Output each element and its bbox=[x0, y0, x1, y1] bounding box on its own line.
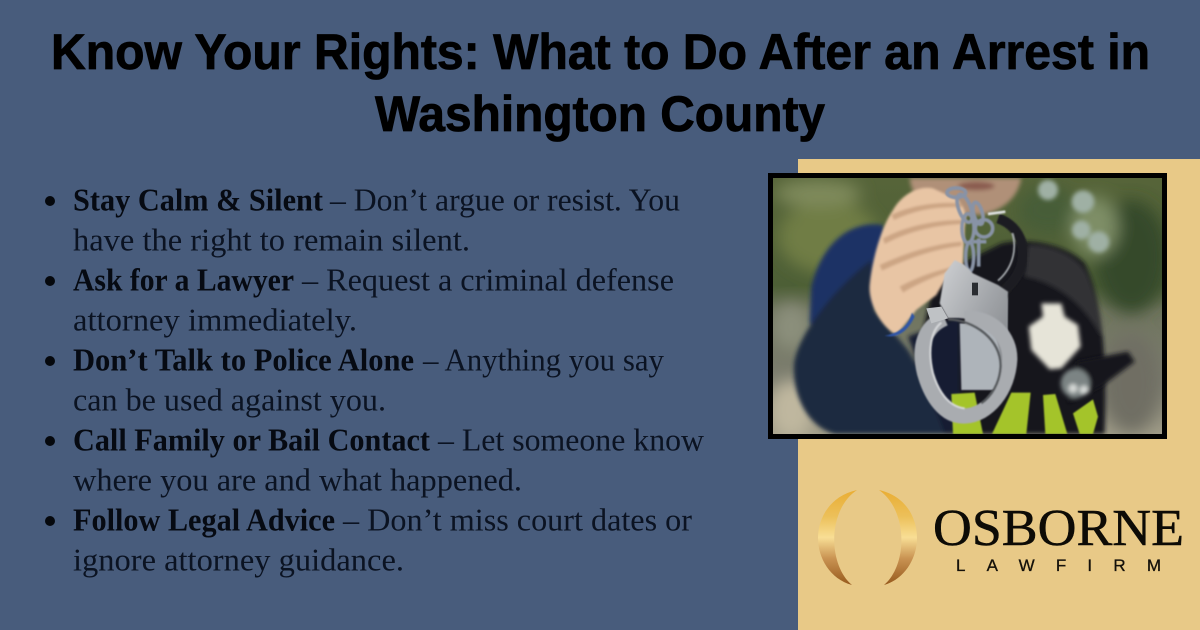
list item: ask for a lawyer bbox=[45, 262, 674, 338]
list item: don't talk to police alone: can be used against you. bbox=[73, 382, 386, 418]
list item: follow legal advice: ignore attorney guidance. bbox=[73, 542, 404, 578]
list item: call family or bail contact: Call Family or Bail Contact bbox=[73, 422, 430, 458]
list item: don't talk to police alone: Don’t Talk to Police Alone bbox=[73, 342, 414, 378]
lower cuff bbox=[922, 318, 1010, 416]
list item: don't talk to police alone: – Anything you say bbox=[422, 342, 664, 378]
list item: ask for a lawyer: attorney immediately. bbox=[73, 302, 357, 338]
list item: follow legal advice bbox=[45, 502, 693, 578]
list item: stay calm and silent: have the right to remain silent. bbox=[73, 222, 470, 258]
list item: call family or bail contact bbox=[45, 422, 704, 498]
logo: Osborne Law Firm bbox=[818, 490, 1184, 585]
hand bbox=[870, 188, 966, 335]
list item: call family or bail contact: – Let someone know bbox=[437, 422, 704, 458]
title: Washington County bbox=[375, 86, 825, 142]
list item: call family or bail contact: where you are and what happened. bbox=[73, 462, 522, 498]
upper cuff bbox=[988, 212, 1023, 296]
list item: follow legal advice: – Don’t miss court dates or bbox=[342, 502, 693, 538]
photo: officer holding handcuffs bbox=[768, 173, 1168, 440]
badge bbox=[1029, 303, 1081, 369]
list item: don't talk to police alone bbox=[45, 342, 664, 418]
list item: ask for a lawyer: – Request a criminal defense bbox=[301, 262, 674, 298]
lock body bbox=[938, 260, 1009, 360]
face bbox=[910, 178, 1021, 215]
chain bbox=[947, 188, 993, 271]
jacket bbox=[794, 224, 1105, 434]
hi-vis stripes bbox=[951, 393, 1098, 434]
title: Know Your Rights: What to Do After an Arrest in bbox=[51, 24, 1150, 80]
panel: list of rights bbox=[45, 182, 704, 578]
title bbox=[51, 24, 1150, 142]
list item: follow legal advice: Follow Legal Advice bbox=[73, 502, 335, 538]
logo subline: LAWFIRM bbox=[956, 556, 1161, 575]
belt gear bbox=[1061, 352, 1135, 403]
id tag bbox=[960, 297, 1007, 390]
list item: stay calm and silent: Stay Calm & Silent bbox=[73, 182, 323, 218]
list item: stay calm and silent: – Don’t argue or resist. You bbox=[329, 182, 680, 218]
logo icon: gold crescents bbox=[818, 490, 917, 585]
list item: ask for a lawyer: Ask for a Lawyer bbox=[73, 262, 294, 298]
panel: gold side panel bbox=[798, 159, 1200, 630]
logo wordmark: OSBORNE bbox=[933, 500, 1184, 557]
list item: stay calm and silent bbox=[45, 182, 680, 258]
